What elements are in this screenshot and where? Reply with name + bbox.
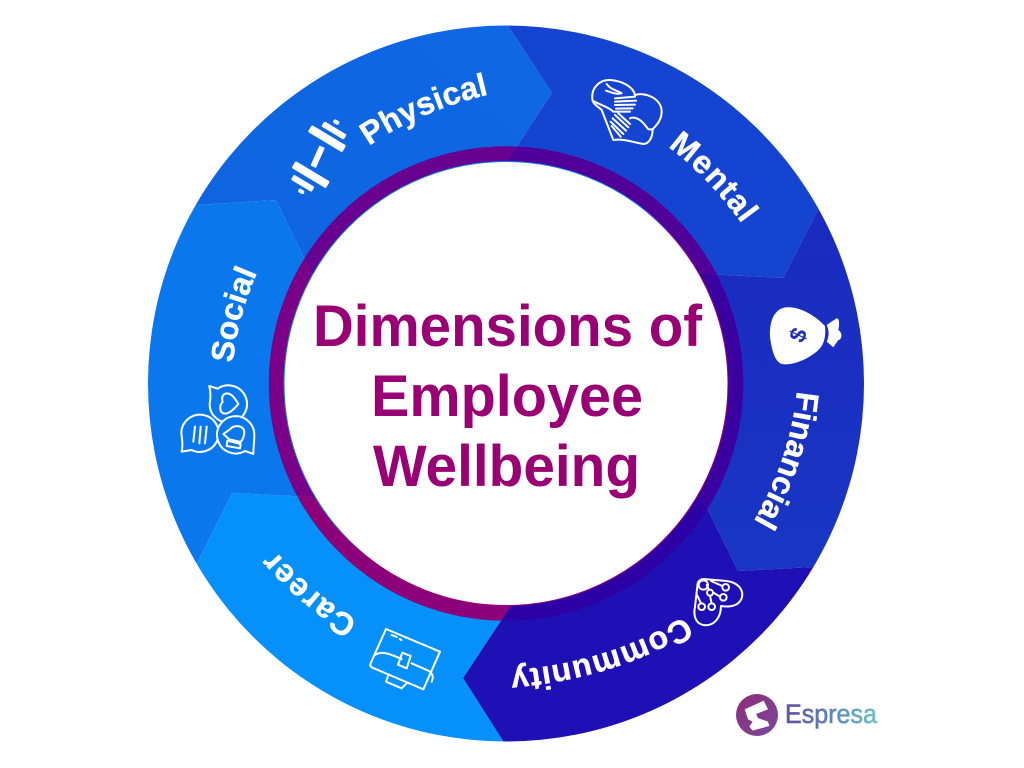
title: Employee — [371, 364, 643, 429]
icon: money bag — [770, 307, 841, 364]
logo: Espresa — [736, 694, 878, 736]
icon: hands and heart — [592, 80, 662, 144]
label: Social: Social — [212, 265, 256, 362]
title — [313, 294, 703, 499]
panel: financial segment — [698, 209, 864, 571]
panel: mental segment — [508, 26, 818, 278]
title: Wellbeing — [373, 434, 640, 499]
icon: dumbbell — [291, 119, 347, 195]
panel: career segment — [196, 493, 510, 742]
label: Mental: Mental — [669, 130, 760, 222]
icon: briefcase screen — [370, 629, 440, 689]
centre circle — [284, 162, 728, 606]
panel: social segment — [148, 200, 312, 564]
logo mark — [736, 694, 778, 736]
label: Physical: Physical — [358, 72, 487, 145]
title: Dimensions of — [313, 294, 703, 359]
inner ring — [276, 154, 736, 613]
icon: speech bubbles — [181, 385, 254, 454]
panel: community segment — [463, 496, 814, 742]
icon: money bag: $ — [784, 324, 813, 346]
logo wordmark: Espresa — [785, 699, 878, 729]
label: Career: Career — [262, 554, 354, 636]
label: Financial: Financial — [754, 392, 819, 532]
icon: community heart — [694, 579, 742, 625]
wellbeing wheel — [148, 26, 864, 742]
panel: physical segment — [196, 26, 552, 274]
label: Community: Community — [512, 620, 691, 690]
